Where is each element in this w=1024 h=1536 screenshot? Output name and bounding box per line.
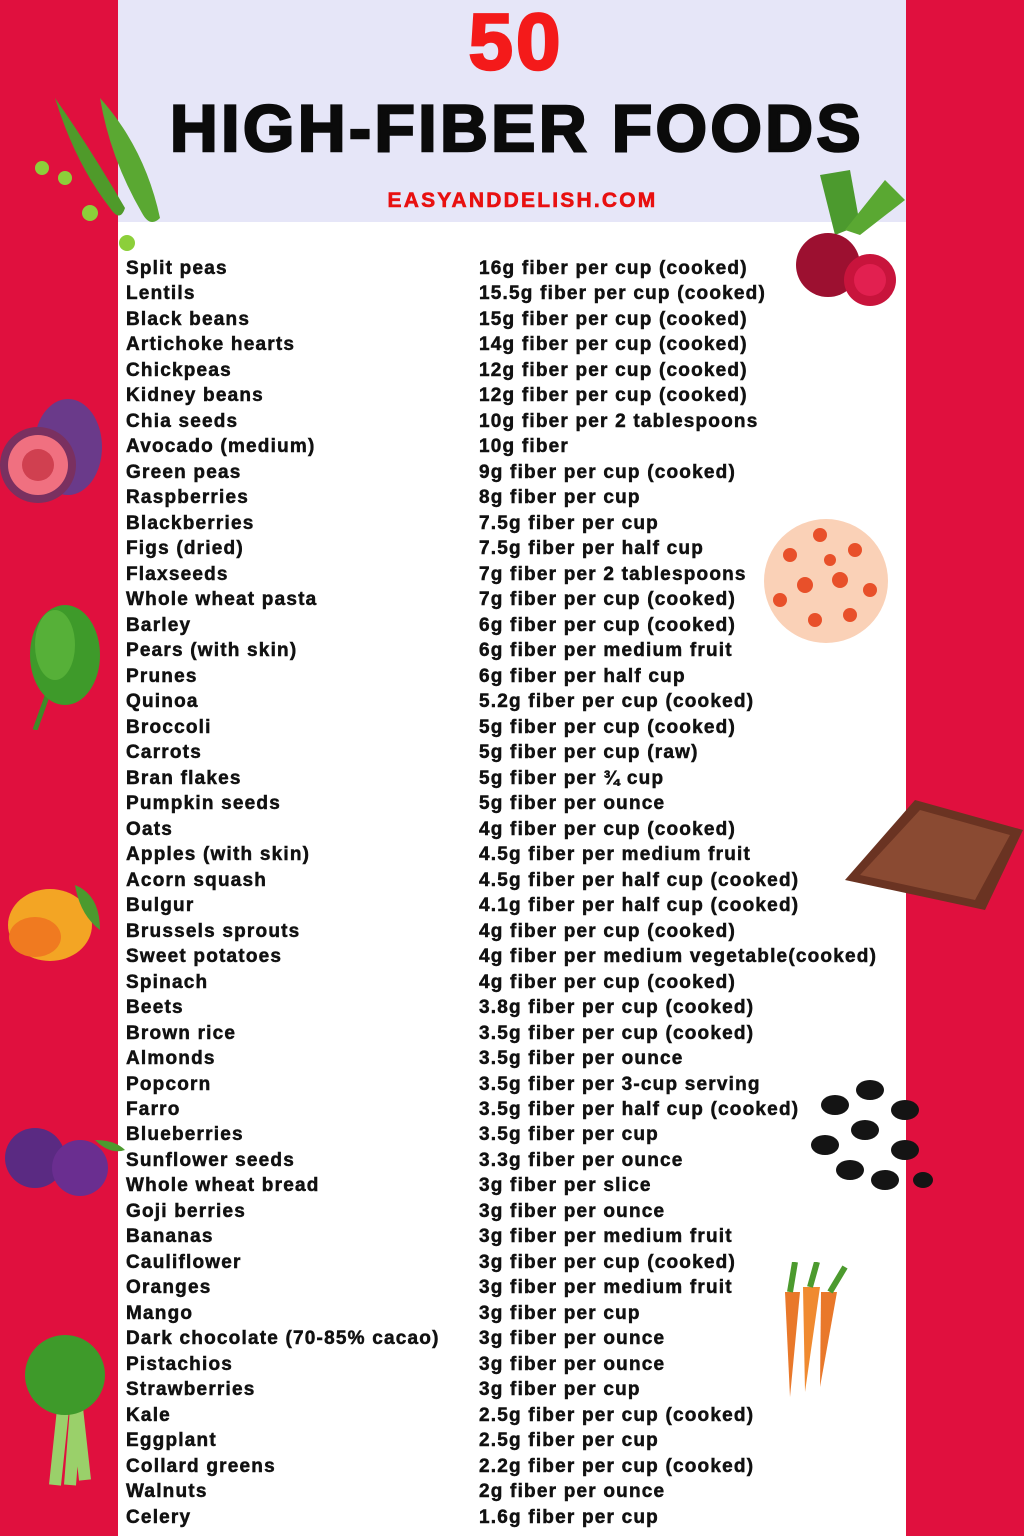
icon: pea pods <box>35 98 160 251</box>
food names column: Goji berries <box>126 1201 246 1222</box>
fiber amounts column: 2g fiber per ounce <box>479 1481 665 1502</box>
food names column: Raspberries <box>126 487 249 508</box>
food names column: Figs (dried) <box>126 538 244 559</box>
food names column: Acorn squash <box>126 870 267 891</box>
food names column: Blackberries <box>126 513 254 534</box>
food names column: Walnuts <box>126 1481 208 1502</box>
fiber amounts column: 2.5g fiber per cup (cooked) <box>479 1405 754 1426</box>
fiber amounts column: 6g fiber per medium fruit <box>479 640 733 661</box>
fiber amounts column: 12g fiber per cup (cooked) <box>479 385 748 406</box>
icon: celery <box>25 1335 105 1486</box>
fiber amounts column: 4.5g fiber per medium fruit <box>479 844 751 865</box>
fiber amounts column: 12g fiber per cup (cooked) <box>479 360 748 381</box>
food names column: Green peas <box>126 462 242 483</box>
fiber amounts column: 7g fiber per 2 tablespoons <box>479 564 747 585</box>
food names column: Flaxseeds <box>126 564 229 585</box>
fiber amounts column: 3g fiber per cup (cooked) <box>479 1252 736 1273</box>
fiber amounts column: 3g fiber per slice <box>479 1175 652 1196</box>
food names column: Whole wheat pasta <box>126 589 317 610</box>
fiber amounts column: 10g fiber per 2 tablespoons <box>479 411 758 432</box>
fiber amounts column: 15.5g fiber per cup (cooked) <box>479 283 766 304</box>
fiber amounts column: 14g fiber per cup (cooked) <box>479 334 748 355</box>
food names column <box>126 258 440 1528</box>
fiber amounts column: 3.5g fiber per ounce <box>479 1048 684 1069</box>
food names column: Carrots <box>126 742 202 763</box>
icon: chocolate <box>845 800 1023 910</box>
fiber amounts column: 5.2g fiber per cup (cooked) <box>479 691 754 712</box>
fiber amounts column: 7.5g fiber per cup <box>479 513 659 534</box>
fiber amounts column: 5g fiber per ounce <box>479 793 665 814</box>
fiber amounts column: 9g fiber per cup (cooked) <box>479 462 736 483</box>
food names column: Blueberries <box>126 1124 244 1145</box>
fiber amounts column: 4.5g fiber per half cup (cooked) <box>479 870 799 891</box>
food names column: Apples (with skin) <box>126 844 310 865</box>
food names column: Broccoli <box>126 717 212 738</box>
food names column: Black beans <box>126 309 250 330</box>
food names column: Quinoa <box>126 691 199 712</box>
food names column: Spinach <box>126 972 208 993</box>
food names column: Bulgur <box>126 895 194 916</box>
food names column: Cauliflower <box>126 1252 242 1273</box>
food names column: Farro <box>126 1099 181 1120</box>
food names column: Prunes <box>126 666 198 687</box>
title: HIGH-FIBER FOODS <box>170 91 864 165</box>
fiber amounts column: 6g fiber per cup (cooked) <box>479 615 736 636</box>
food names column: Collard greens <box>126 1456 276 1477</box>
food names column: Dark chocolate (70-85% cacao) <box>126 1328 440 1349</box>
fiber amounts column: 16g fiber per cup (cooked) <box>479 258 748 279</box>
fiber amounts column: 1.6g fiber per cup <box>479 1507 659 1528</box>
fiber amounts column: 3.5g fiber per cup (cooked) <box>479 1023 754 1044</box>
food names column: Eggplant <box>126 1430 217 1451</box>
food names column: Almonds <box>126 1048 216 1069</box>
icon: fig <box>0 399 102 503</box>
fiber amounts column: 3g fiber per ounce <box>479 1201 665 1222</box>
fiber amounts column: 15g fiber per cup (cooked) <box>479 309 748 330</box>
icon: mango <box>8 885 100 961</box>
food names column: Split peas <box>126 258 228 279</box>
food names column: Celery <box>126 1507 191 1528</box>
food names column: Artichoke hearts <box>126 334 295 355</box>
fiber amounts column: 8g fiber per cup <box>479 487 641 508</box>
food names column: Oranges <box>126 1277 212 1298</box>
fiber amounts column: 3.5g fiber per half cup (cooked) <box>479 1099 799 1120</box>
food names column: Barley <box>126 615 191 636</box>
food names column: Kidney beans <box>126 385 264 406</box>
icon: kale <box>30 605 100 730</box>
fiber amounts column: 3g fiber per medium fruit <box>479 1226 733 1247</box>
fiber amounts column <box>479 258 877 1528</box>
fiber amounts column: 4g fiber per cup (cooked) <box>479 972 736 993</box>
fiber amounts column: 7.5g fiber per half cup <box>479 538 704 559</box>
fiber amounts column: 4g fiber per cup (cooked) <box>479 921 736 942</box>
food names column: Pistachios <box>126 1354 233 1375</box>
food names column: Oats <box>126 819 173 840</box>
icon: black beans <box>811 1080 933 1190</box>
food names column: Strawberries <box>126 1379 256 1400</box>
fiber amounts column: 3g fiber per ounce <box>479 1328 665 1349</box>
food names column: Kale <box>126 1405 171 1426</box>
icon: lentils <box>764 519 888 643</box>
fiber amounts column: 4g fiber per cup (cooked) <box>479 819 736 840</box>
food names column: Sunflower seeds <box>126 1150 295 1171</box>
icon: plums <box>5 1128 125 1196</box>
fiber amounts column: 10g fiber <box>479 436 569 457</box>
fiber amounts column: 3g fiber per ounce <box>479 1354 665 1375</box>
fiber amounts column: 7g fiber per cup (cooked) <box>479 589 736 610</box>
fiber amounts column: 2.5g fiber per cup <box>479 1430 659 1451</box>
white panel <box>118 0 906 1536</box>
fiber amounts column: 3g fiber per medium fruit <box>479 1277 733 1298</box>
food names column: Bananas <box>126 1226 214 1247</box>
food names column: Beets <box>126 997 184 1018</box>
fiber amounts column: 3.5g fiber per cup <box>479 1124 659 1145</box>
food names column: Brown rice <box>126 1023 236 1044</box>
food names column: Mango <box>126 1303 193 1324</box>
fiber amounts column: 2.2g fiber per cup (cooked) <box>479 1456 754 1477</box>
fiber amounts column: 5g fiber per cup (cooked) <box>479 717 736 738</box>
food names column: Chia seeds <box>126 411 238 432</box>
fiber amounts column: 3g fiber per cup <box>479 1303 641 1324</box>
food names column: Popcorn <box>126 1074 211 1094</box>
food names column: Avocado (medium) <box>126 436 316 457</box>
fiber amounts column: 3.5g fiber per 3-cup serving <box>479 1074 761 1094</box>
food names column: Pumpkin seeds <box>126 793 281 814</box>
fiber amounts column: 3g fiber per cup <box>479 1379 641 1400</box>
food names column: Chickpeas <box>126 360 232 381</box>
food names column: Sweet potatoes <box>126 946 282 967</box>
icon: beet <box>796 170 905 306</box>
icon: carrots <box>785 1262 848 1397</box>
fiber amounts column: 3.3g fiber per ounce <box>479 1150 684 1171</box>
fiber amounts column: 4g fiber per medium vegetable(cooked) <box>479 946 877 967</box>
fiber amounts column: 4.1g fiber per half cup (cooked) <box>479 895 799 916</box>
food names column: Whole wheat bread <box>126 1175 320 1196</box>
food names column: Lentils <box>126 283 196 304</box>
fiber amounts column: 5g fiber per ¾ cup <box>479 768 664 789</box>
fiber amounts column: 3.8g fiber per cup (cooked) <box>479 997 754 1018</box>
food names column: Brussels sprouts <box>126 921 300 942</box>
food names column: Bran flakes <box>126 768 242 789</box>
fiber amounts column: 6g fiber per half cup <box>479 666 686 687</box>
food names column: Pears (with skin) <box>126 640 297 661</box>
header band <box>118 0 906 222</box>
fiber amounts column: 5g fiber per cup (raw) <box>479 742 699 763</box>
website url: EASYANDDELISH.COM <box>388 189 658 212</box>
